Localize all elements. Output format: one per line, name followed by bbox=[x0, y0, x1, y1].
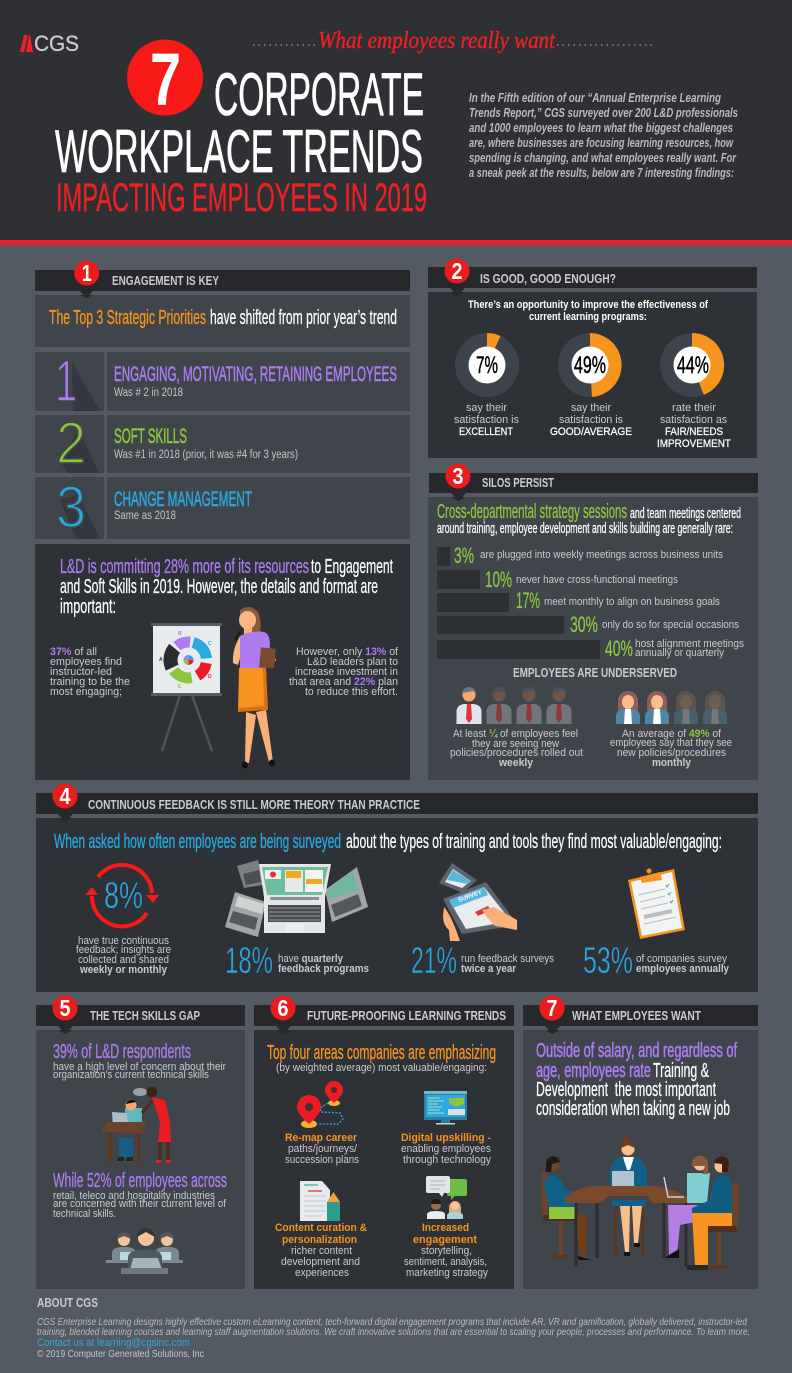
section 2 header bar: IS GOOD, GOOD ENOUGH? bbox=[480, 271, 616, 286]
section 1: engagement is key bbox=[35, 260, 410, 780]
feedback panel bbox=[36, 818, 758, 992]
caption 8 percent: collected and shared bbox=[78, 954, 169, 966]
copyright: © 2019 Computer Generated Solutions, Inc bbox=[37, 1348, 204, 1360]
priority 1: 1 bbox=[55, 349, 77, 414]
caption increased engagement: engagement bbox=[413, 1234, 477, 1246]
caption digital upskilling: enabling employees bbox=[401, 1143, 491, 1155]
section 4 header bar: CONTINUOUS FEEDBACK IS STILL MORE THEORY THAN PRACTICE bbox=[88, 797, 420, 812]
stat 53 percent: employees annually bbox=[636, 963, 730, 975]
trends heading: Top four areas companies are emphasizing bbox=[267, 1042, 496, 1064]
label excellent: satisfaction is bbox=[454, 414, 519, 426]
priority 3 bbox=[35, 475, 410, 540]
bar 40 percent: annually or quarterly bbox=[635, 647, 724, 659]
label excellent: say their bbox=[466, 402, 507, 414]
stat 21 percent bbox=[411, 940, 554, 981]
priority 2: 2 bbox=[56, 411, 86, 476]
icon: male employees row bbox=[456, 687, 572, 724]
section 6 header bar: FUTURE-PROOFING LEARNING TRENDS bbox=[307, 1008, 506, 1023]
caption increased engagement: storytelling, bbox=[421, 1245, 472, 1257]
right stat text: increase investment in bbox=[295, 666, 398, 678]
weekly caption bbox=[450, 728, 583, 769]
donut 7 percent bbox=[455, 333, 519, 397]
stat 52 percent bbox=[53, 1170, 227, 1220]
bar 17 percent: 17% bbox=[516, 588, 540, 613]
section 5: the tech skills gap bbox=[36, 995, 245, 1289]
footer: about CGS bbox=[37, 1295, 750, 1360]
stat 52 percent: While 52% of employees across bbox=[53, 1170, 227, 1192]
learning trends panel bbox=[254, 1030, 514, 1289]
section 1 header bar: 1 bbox=[82, 260, 92, 286]
label good average bbox=[550, 402, 632, 438]
icon: coworkers at desk bbox=[101, 1086, 171, 1163]
priority 3: Same as 2018 bbox=[114, 510, 176, 522]
donut 49 percent bbox=[558, 333, 622, 397]
right stat text: to reduce this effort. bbox=[305, 686, 398, 698]
silos panel bbox=[428, 497, 758, 780]
right stat text: that area and 22% plan bbox=[289, 676, 398, 688]
bar 10 percent: 10% bbox=[485, 567, 512, 592]
section 6 header bar bbox=[254, 995, 514, 1034]
bar chart: meeting frequency bbox=[437, 543, 744, 661]
panel intro: There’s an opportunity to improve the effectiveness of bbox=[468, 299, 708, 311]
bar 3 percent: 3% bbox=[454, 543, 474, 568]
badge: number 7: 7 bbox=[150, 38, 181, 121]
left stat text bbox=[50, 646, 130, 698]
icon: easel with chart: C bbox=[208, 641, 212, 647]
section 7: what employees want bbox=[523, 995, 758, 1289]
caption re-map career: succession plans bbox=[285, 1154, 359, 1166]
caption 8 percent: have true continuous bbox=[78, 935, 169, 947]
panel intro bbox=[468, 299, 708, 323]
header banner bbox=[0, 0, 792, 245]
footer body bbox=[37, 1316, 750, 1338]
bar 40 percent: 40% bbox=[605, 636, 633, 661]
section 3 header bar: 3 bbox=[452, 463, 464, 489]
title: CORPORATE bbox=[214, 61, 424, 128]
intro paragraph: In the Fifth edition of our “Annual Enterprise Learning bbox=[469, 91, 721, 105]
monthly caption: An average of 49% of bbox=[622, 728, 722, 740]
caption content curation: Content curation & bbox=[275, 1222, 367, 1234]
caption content curation bbox=[275, 1222, 367, 1279]
caption re-map career: Re-map career bbox=[285, 1132, 358, 1144]
section 5 header bar: 5 bbox=[60, 995, 71, 1021]
icon: monitor bbox=[424, 1091, 467, 1124]
icon: easel with chart: E bbox=[178, 684, 182, 690]
donut 44 percent: 44% bbox=[677, 352, 709, 379]
caption 8 percent bbox=[76, 935, 171, 976]
priority 1: ENGAGING, MOTIVATING, RETAINING EMPLOYEES bbox=[114, 363, 397, 386]
bar 10 percent bbox=[437, 567, 678, 592]
section 7 header bar: 7 bbox=[546, 995, 558, 1021]
icon: presenter woman bbox=[233, 607, 276, 768]
stat 39 percent: organization’s current technical skills bbox=[53, 1069, 209, 1081]
panel intro: current learning programs: bbox=[529, 311, 647, 323]
title: IMPACTING EMPLOYEES IN 2019 bbox=[56, 176, 427, 220]
section 4: continuous feedback bbox=[36, 783, 758, 992]
section 3: silos persist bbox=[428, 463, 758, 780]
resources statement: to Engagement bbox=[311, 556, 393, 578]
bar 30 percent: 30% bbox=[570, 612, 598, 637]
label good average: GOOD/AVERAGE bbox=[550, 426, 632, 438]
icon: meeting around table bbox=[542, 1136, 738, 1270]
caption digital upskilling: Digital upskilling - bbox=[401, 1132, 491, 1144]
tagline: what employees really want: What employees really want bbox=[318, 28, 556, 54]
want statement: age, employees rate bbox=[536, 1060, 651, 1082]
priority 3: 3 bbox=[56, 475, 86, 540]
icon: chat bubbles and people bbox=[426, 1176, 467, 1219]
priority 1: Was # 2 in 2018 bbox=[114, 387, 183, 399]
section 7 header bar bbox=[523, 995, 758, 1034]
icon: easel with chart: A bbox=[159, 657, 163, 663]
icon: easel with chart: D bbox=[208, 674, 212, 680]
label fair needs improvement bbox=[657, 402, 731, 450]
satisfaction panel bbox=[428, 292, 757, 458]
section 2: is good, good enough bbox=[428, 258, 757, 458]
section 4 header bar: 4 bbox=[60, 783, 71, 809]
trends heading bbox=[267, 1042, 496, 1074]
resources statement bbox=[60, 556, 393, 618]
monthly caption: monthly bbox=[652, 757, 692, 769]
caption re-map career bbox=[285, 1132, 359, 1166]
caption digital upskilling: through technology bbox=[403, 1154, 491, 1166]
want statement: Training & bbox=[653, 1060, 709, 1082]
caption content curation: experiences bbox=[295, 1267, 349, 1279]
bar 40 percent bbox=[437, 636, 744, 661]
label good average: say their bbox=[571, 402, 611, 414]
donut 44 percent bbox=[660, 333, 724, 397]
priorities heading panel: The Top 3 Strategic Priorities bbox=[49, 307, 206, 329]
subheading: employees are underserved: EMPLOYEES ARE UNDERSERVED bbox=[513, 665, 677, 680]
footer heading: ABOUT CGS bbox=[37, 1295, 98, 1310]
label fair needs improvement: satisfaction as bbox=[660, 414, 727, 426]
label excellent bbox=[454, 402, 519, 438]
stat 18 percent: 18% bbox=[225, 940, 273, 981]
stat 18 percent: have quarterly bbox=[278, 953, 344, 965]
caption 8 percent: feedback; insights are bbox=[76, 944, 171, 956]
section 2 header bar bbox=[428, 258, 757, 296]
section 3 header bar: SILOS PERSIST bbox=[482, 475, 554, 490]
icon: survey tablets: SURVEY bbox=[458, 890, 483, 904]
trends heading: (by weighted average) most valuable/engaging: bbox=[276, 1062, 487, 1074]
resources statement: and Soft Skills in 2019. However, the details and format are bbox=[60, 576, 378, 598]
bar 30 percent: only do so for special occasions bbox=[602, 619, 739, 631]
stat 52 percent: retail, teleco and hospitality industries bbox=[53, 1190, 215, 1202]
stat 18 percent bbox=[225, 940, 369, 981]
monthly caption: new policies/procedures bbox=[617, 747, 726, 759]
bar 17 percent bbox=[437, 588, 720, 613]
icon: clipboard bbox=[628, 868, 685, 939]
stat 21 percent: 21% bbox=[411, 940, 457, 981]
caption content curation: richer content bbox=[291, 1245, 352, 1257]
stat 53 percent bbox=[583, 940, 730, 981]
stat 18 percent: feedback programs bbox=[278, 963, 369, 975]
caption content curation: personalization bbox=[282, 1234, 357, 1246]
right stat text: L&D leaders plan to bbox=[307, 656, 398, 668]
left stat text: 37% of all bbox=[50, 646, 97, 658]
left stat text: training to be the bbox=[50, 676, 130, 688]
stat 39 percent: have a high level of concern about their bbox=[53, 1061, 226, 1073]
icon: document and pencil bbox=[300, 1181, 340, 1221]
label good average: satisfaction is bbox=[559, 414, 623, 426]
icon: map pins bbox=[297, 1081, 343, 1128]
weekly caption: they are seeing new bbox=[472, 738, 559, 750]
monthly caption bbox=[610, 728, 732, 769]
bar 30 percent bbox=[437, 612, 739, 637]
icon: team with laptops bbox=[106, 1228, 183, 1274]
donut 49 percent: 49% bbox=[574, 352, 606, 379]
bar 10 percent: never have cross-functional meetings bbox=[516, 574, 678, 586]
left stat text: most engaging; bbox=[50, 686, 122, 698]
priority 2: SOFT SKILLS bbox=[114, 425, 187, 448]
priority 1 bbox=[35, 349, 410, 414]
weekly caption: weekly bbox=[498, 757, 534, 769]
what employees want panel bbox=[523, 1030, 758, 1289]
section 7 header bar: WHAT EMPLOYEES WANT bbox=[572, 1008, 701, 1023]
label fair needs improvement: rate their bbox=[672, 402, 716, 414]
silos statement: Cross-departmental strategy sessions bbox=[437, 501, 627, 523]
caption re-map career: paths/journeys/ bbox=[288, 1143, 358, 1155]
priority 2: Was #1 in 2018 (prior, it was #4 for 3 years) bbox=[114, 449, 298, 461]
caption increased engagement: sentiment, analysis, bbox=[404, 1256, 487, 1268]
section 6 header bar: 6 bbox=[278, 995, 288, 1021]
bar 17 percent: meet monthly to align on business goals bbox=[544, 596, 720, 608]
stat 21 percent: run feedback surveys bbox=[461, 953, 554, 965]
stat 53 percent: 53% bbox=[583, 940, 633, 981]
CGS logo: CGS bbox=[34, 31, 79, 56]
priority 3: CHANGE MANAGEMENT bbox=[114, 488, 252, 511]
section 1 header bar bbox=[35, 260, 410, 298]
label fair needs improvement: IMPROVEMENT bbox=[657, 438, 731, 450]
section 4 header bar bbox=[36, 783, 758, 822]
icon: cycle arrows with 8 percent: 8% bbox=[104, 875, 143, 916]
caption content curation: development and bbox=[281, 1256, 360, 1268]
section 5 header bar bbox=[36, 995, 245, 1034]
section 5 header bar: THE TECH SKILLS GAP bbox=[90, 1008, 200, 1023]
section 3 header bar bbox=[429, 463, 758, 501]
badge: number 7 bbox=[127, 38, 203, 121]
tech skills panel bbox=[36, 1030, 245, 1289]
caption digital upskilling bbox=[401, 1132, 491, 1166]
stat 39 percent bbox=[53, 1041, 226, 1081]
donut 7 percent: 7% bbox=[476, 352, 498, 379]
feedback heading: When asked how often employees are being surveyed bbox=[54, 831, 341, 853]
priority 2 bbox=[35, 411, 410, 476]
bar 3 percent: are plugged into weekly meetings across business units bbox=[480, 549, 723, 561]
title bbox=[55, 61, 427, 220]
stat 39 percent: 39% of L&D respondents bbox=[53, 1041, 191, 1063]
icon: cycle arrows with 8 percent bbox=[85, 865, 159, 926]
label excellent: EXCELLENT bbox=[459, 426, 513, 438]
resources statement: important: bbox=[60, 596, 116, 618]
caption 8 percent: weekly or monthly bbox=[79, 964, 168, 976]
weekly caption: At least ¼ of employees feel bbox=[453, 728, 578, 740]
silos statement bbox=[437, 501, 741, 537]
caption increased engagement bbox=[404, 1222, 488, 1279]
left stat text: employees find bbox=[50, 656, 122, 668]
want statement bbox=[536, 1040, 737, 1120]
left stat text: instructor-led bbox=[50, 666, 112, 678]
label fair needs improvement: FAIR/NEEDS bbox=[665, 426, 723, 438]
caption increased engagement: Increased bbox=[422, 1222, 469, 1234]
stat 53 percent: of companies survey bbox=[636, 953, 727, 965]
icon: laptops bbox=[225, 860, 368, 937]
icon: female employees row bbox=[616, 691, 727, 724]
resources panel bbox=[35, 544, 410, 780]
weekly caption: policies/procedures rolled out bbox=[450, 747, 583, 759]
resources statement: L&D is committing 28% more of its resources bbox=[60, 556, 309, 578]
bar 3 percent bbox=[437, 543, 723, 568]
stat 52 percent: are concerned with their current level of bbox=[53, 1198, 227, 1210]
title: WORKPLACE TRENDS bbox=[55, 118, 423, 185]
caption increased engagement: marketing strategy bbox=[406, 1267, 488, 1279]
icon: easel with chart bbox=[151, 623, 222, 751]
section 6: future-proofing learning trends bbox=[254, 995, 514, 1289]
stat 21 percent: twice a year bbox=[461, 963, 517, 975]
icon: easel with chart: B bbox=[178, 631, 182, 637]
contact line: Contact us at learning@cgsinc.com bbox=[37, 1337, 190, 1349]
stat 52 percent: technical skills. bbox=[53, 1208, 116, 1220]
priorities heading panel bbox=[35, 295, 410, 347]
section 2 header bar: 2 bbox=[452, 258, 462, 284]
bar 40 percent: host alignment meetings bbox=[635, 638, 744, 650]
priorities heading panel: have shifted from prior year’s trend bbox=[210, 307, 397, 329]
monthly caption: employees say that they see bbox=[610, 737, 732, 749]
right stat text bbox=[289, 646, 399, 698]
right stat text: However, only 13% of bbox=[296, 646, 399, 658]
section 1 header bar: ENGAGEMENT IS KEY bbox=[112, 273, 219, 288]
icon: survey tablets bbox=[439, 863, 518, 941]
intro paragraph bbox=[469, 91, 738, 180]
